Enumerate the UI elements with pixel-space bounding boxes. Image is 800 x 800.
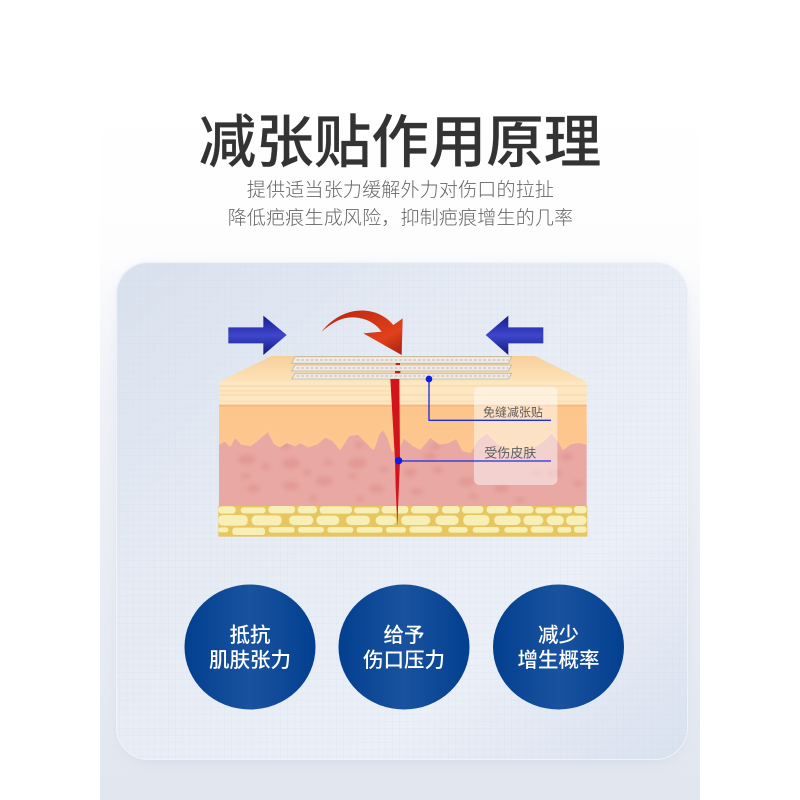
title: 减张贴作用原理 bbox=[199, 111, 601, 175]
icon: right blue arrow bbox=[228, 316, 287, 355]
label backing panel bbox=[474, 387, 557, 485]
callout: resist skin tension: 肌肤张力 bbox=[209, 649, 291, 672]
subtitle text: 降低疤痕生成风险，抑制疤痕增生的几率 bbox=[228, 207, 573, 229]
top surface of skin bbox=[219, 356, 587, 382]
callout: apply wound pressure: 伤口压力 bbox=[363, 649, 445, 672]
stratum stripes bbox=[219, 382, 587, 406]
panel: principle card bbox=[116, 262, 688, 762]
fat cell layer bbox=[218, 506, 587, 537]
background strip bbox=[100, 100, 700, 800]
subtitle text: 提供适当张力缓解外力对伤口的拉扯 bbox=[247, 179, 554, 201]
callout: reduce hyperplasia: 减少 bbox=[538, 624, 579, 647]
leader line: strip bbox=[426, 376, 551, 420]
label: strip: 免缝减张贴 bbox=[483, 404, 543, 419]
skin diagram bbox=[218, 311, 587, 537]
wound cut bbox=[390, 363, 400, 527]
subtitle text bbox=[228, 179, 573, 229]
orange wavy layer bbox=[219, 405, 587, 452]
label: injured skin: 受伤皮肤 bbox=[484, 445, 536, 460]
callout: resist skin tension bbox=[184, 584, 316, 710]
callout: apply wound pressure: 给予 bbox=[384, 624, 424, 647]
callout: reduce hyperplasia bbox=[493, 584, 624, 710]
callout: reduce hyperplasia: 增生概率 bbox=[518, 649, 600, 672]
leader line: wound bbox=[395, 457, 551, 464]
dermis pink layer bbox=[219, 428, 587, 508]
callout: apply wound pressure bbox=[338, 584, 470, 710]
icon: red curved arrow bbox=[322, 311, 403, 355]
tension strips bbox=[292, 357, 512, 379]
callout: resist skin tension: 抵抗 bbox=[230, 624, 270, 647]
icon: left blue arrow bbox=[486, 316, 543, 355]
